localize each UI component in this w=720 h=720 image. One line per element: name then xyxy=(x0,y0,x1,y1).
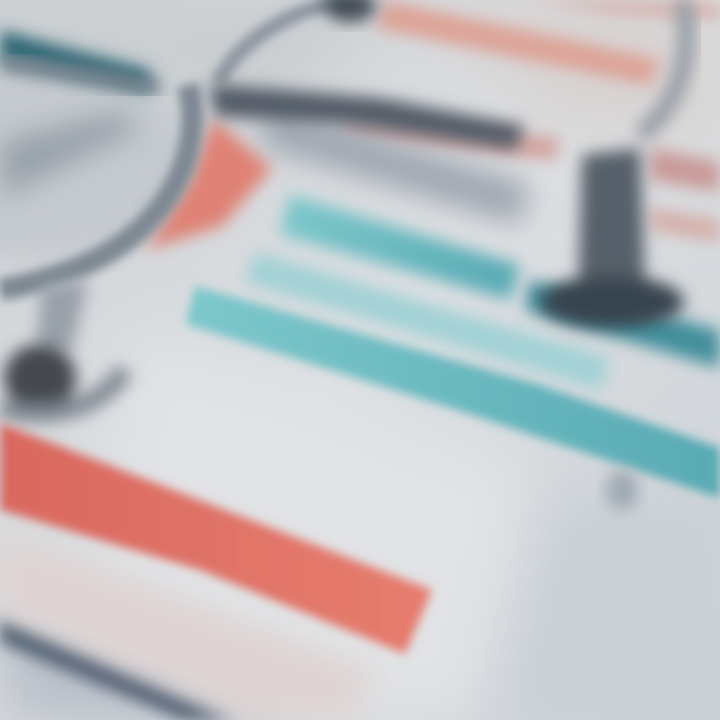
magnifier arc top xyxy=(218,0,345,82)
small tick lower right xyxy=(606,470,638,510)
right stand xyxy=(540,148,684,328)
lens: left magnifier glass xyxy=(0,60,195,260)
coral patch behind lens xyxy=(145,118,272,250)
teal right segment xyxy=(525,280,720,368)
grey band below stripes xyxy=(260,105,530,225)
teal bar upper xyxy=(280,195,520,300)
coral bar bottom left xyxy=(0,423,432,654)
pale band under coral xyxy=(0,530,380,720)
lens rim xyxy=(0,85,192,290)
right magnifier arc xyxy=(640,0,687,135)
left stand xyxy=(0,280,125,413)
dark handle across top xyxy=(210,84,525,150)
dark teal bar top left xyxy=(0,30,150,92)
dark line bottom left xyxy=(0,618,235,720)
teal bar long xyxy=(186,286,720,498)
teal faint middle bar xyxy=(245,252,610,390)
stripes: pale coral top right xyxy=(340,0,720,242)
